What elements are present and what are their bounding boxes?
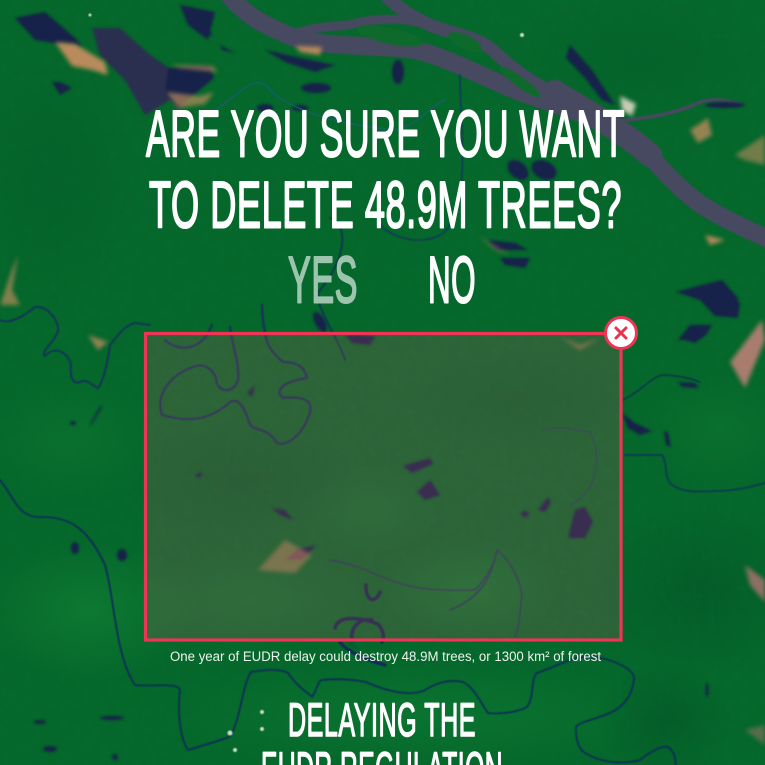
- highlighted forest area: [146, 334, 621, 640]
- river islands: [355, 21, 543, 101]
- closing heading: [261, 693, 503, 765]
- clouds and small clearings: [88, 14, 524, 752]
- infographic canvas: NO: [428, 242, 476, 316]
- option: yes: YES: [288, 242, 358, 316]
- main river channels: [229, 0, 765, 240]
- close icon: [606, 318, 636, 348]
- heading: are you sure: [146, 96, 625, 242]
- closing heading line 1: DELAYING THE: [288, 693, 476, 746]
- caption: One year of EUDR delay could destroy 48.9M trees, or 1300 km² of forest: [170, 649, 601, 664]
